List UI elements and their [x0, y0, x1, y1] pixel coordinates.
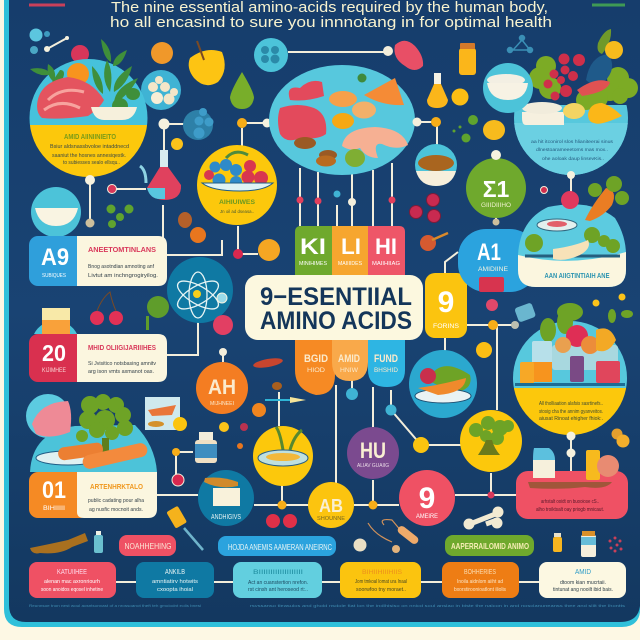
text: [88, 498, 145, 513]
bars: KI LI HI: LI: [341, 234, 361, 259]
icon: lemon: [483, 120, 505, 140]
line dots: [85, 175, 95, 228]
text: Livtut am inchngrogiryilog.: [88, 273, 159, 279]
icon: red dots: [608, 536, 622, 552]
text: [88, 361, 156, 375]
panel: pink 9 circle: [399, 470, 494, 526]
panel: yellow broccoli circle: [460, 410, 522, 472]
label pill: green: AAPERRAILOMID ANIMO: [451, 541, 529, 551]
panel: purple circle: [347, 427, 399, 479]
text: saaniut the hosnes annesiqestk.: [52, 153, 126, 159]
bars: BGID AMID FUND: [295, 340, 405, 395]
panel: AB circle: [308, 482, 378, 528]
bottom box: orange: BOHHERIES: [464, 569, 496, 576]
bars: KI LI HI: KI: [300, 234, 326, 259]
bars: KI LI HI: MAIIIIDES: [338, 261, 362, 267]
heading: AMID AIINIINIEITO: [64, 134, 116, 141]
panel: A1: AMIDIINE: [478, 267, 508, 273]
text: stosig cha the annim gyanveitos.: [539, 409, 603, 415]
bars: BGID AMID FUND: FUND: [374, 353, 398, 365]
panel: 9 yellow: 9: [438, 286, 454, 319]
icon: orange ovals: [178, 212, 206, 243]
panel: pink 9 circle: AMEIRE: [416, 514, 438, 520]
bars: KI LI HI: [295, 226, 405, 275]
bottom box: red: soon anoidos eqosel inhetine: [41, 587, 103, 593]
meat: [37, 77, 104, 119]
connector lines: [47, 38, 571, 582]
icon: yellow flask: [427, 73, 448, 108]
label pill: red: [119, 535, 176, 556]
bowl: [91, 107, 137, 120]
panel: AH circle: MIJHNEEI: [210, 401, 234, 407]
bars: BGID AMID FUND: BHSHID: [374, 368, 399, 374]
bottom box: yellow: BIHIIHIIIHIIS: [362, 569, 403, 576]
panel: A1: [458, 229, 538, 292]
panel: A9: A9: [41, 244, 69, 271]
icon: red ball: [540, 171, 579, 209]
bottom box: red: KATUIIHEE: [57, 569, 87, 576]
text: [536, 499, 604, 513]
text: aa hit itconirol slos hlianiteerai sinus: [531, 139, 614, 145]
panel: blue food circle: [409, 350, 477, 418]
panel: red plate: [516, 448, 628, 519]
bars: BGID AMID FUND: HNIW: [340, 368, 358, 374]
panel: 20: [29, 334, 167, 382]
icon: rice bowl circle: [483, 63, 533, 113]
panel: teal circle: ANDHIGIVS: [211, 514, 241, 521]
icon: yellow jar: [459, 43, 476, 75]
icon: green drop: [230, 72, 254, 109]
bottom box: cyan: rst cinsh ant heroseod rt:..: [248, 587, 308, 593]
bottom box: orange: [442, 562, 519, 598]
panel: right plate: AAN AIIGTINTIAIH ANE: [544, 273, 610, 280]
bottom box: orange: Inoila aidnlom aiiht ad: [457, 579, 503, 585]
panel: 20: 20: [42, 340, 66, 366]
bars: BGID AMID FUND: AMID: [338, 353, 360, 365]
panel: 20: KIJIMHEE: [42, 368, 66, 374]
text: [531, 139, 614, 162]
bars: BGID AMID FUND: BGID: [304, 353, 328, 365]
panel: 01 food: 01: [42, 477, 66, 504]
icon: small bottles: [553, 531, 596, 557]
text: Bsiur aldsnassbvoloe intaddnecd: [50, 144, 129, 150]
line dots: [346, 320, 519, 453]
panel: top left food circle: [29, 39, 149, 180]
icon: green dots: [106, 204, 134, 228]
title: [110, 0, 552, 31]
center title box: AMINO ACIDS: [260, 307, 412, 335]
icon: meat piece: [394, 41, 423, 70]
footer small text: [29, 604, 625, 608]
heading: MHID OLIIGIJARIIIHES: [88, 345, 156, 352]
text: [88, 264, 159, 279]
text: dlnestoarameeetoms mas mox..: [536, 147, 608, 153]
text: to subiesses sealo ellsqu..: [63, 160, 120, 166]
panel: 9 yellow: FORINS: [433, 324, 459, 330]
icon: brown figure: [30, 533, 88, 553]
bottom box: teal: ANKILB: [165, 569, 185, 576]
icon: brown bowl circle: [415, 144, 457, 186]
panel: yellow plate circle: [253, 426, 313, 486]
panel: AH circle: [196, 348, 248, 414]
text: arhstalt ooidt on buooiose cS..: [541, 499, 599, 505]
text: arg ison vmts axmanot oas.: [88, 369, 154, 375]
bottom box: teal: cxoopta ihoial: [157, 587, 193, 593]
label pill: green: [445, 535, 534, 556]
bottom box: yellow: Jom tmkoal lomat ura Inaal: [355, 579, 407, 585]
panel: right food semicircle: [514, 29, 638, 178]
center title box: 9−ESENTIIAL: [260, 283, 412, 311]
panel: teal circle: [198, 470, 254, 526]
bottom box: yellow: soorwfoo tny moraet..: [356, 587, 406, 593]
icon: small tree: [146, 296, 169, 330]
footer small text: rsvssanso tleasulos and ghold nsdole fiat lon the indlhisiso on nnicd soul anslao in biste the nalcon in and nosclanuneanss thee and slilt the lhontts: [250, 604, 625, 608]
panel: AB circle: AB: [319, 496, 343, 516]
bubbles top left: [30, 28, 69, 54]
heading: ANEETOMTINLANS: [88, 247, 156, 254]
panel: A1: A1: [477, 239, 501, 266]
icon: white nuts circle: [141, 70, 181, 110]
icon: meat slices: [253, 356, 283, 370]
panel: green circle: Σ1: [483, 176, 510, 202]
icon: molecule circle: [254, 38, 288, 72]
panel: yellow berries circle: [197, 145, 277, 225]
icon: blue molecule top right: [508, 36, 532, 52]
icon: carrot and greens: [585, 176, 629, 221]
icon: white bowl circle: [31, 187, 81, 237]
icon: small bottle: [94, 531, 103, 553]
panel: right big circle: [513, 310, 628, 458]
panel: AH circle: AH: [208, 376, 236, 399]
bottom box: yellow: [340, 562, 421, 598]
panel: 01 food: BIHIIIII: [43, 506, 65, 512]
bottom box: cream: AMID: [575, 569, 591, 576]
panel: right plate: [518, 204, 626, 287]
icon: bones: [466, 509, 501, 527]
bottom box: teal: amntiatirv hotwits: [152, 579, 198, 585]
icon: salmon card: [145, 397, 187, 431]
bottom box: cream: dtoom kian mucrtaii.: [560, 580, 606, 586]
line dots: [296, 46, 441, 206]
text: public cadating pour alha: [88, 498, 145, 504]
icon: orange ball: [151, 42, 173, 64]
bars: BGID AMID FUND: HIOD: [307, 368, 326, 374]
panel: central food circle: [269, 65, 415, 175]
label pill: blue: [218, 536, 336, 556]
label pill: blue: HOJDA ANEMIS AAMERAN ANEIRNC: [228, 542, 332, 552]
icon: big red ball: [213, 315, 233, 335]
icon: berry rings: [410, 194, 440, 222]
bars: KI LI HI: HI: [375, 234, 397, 259]
text: [539, 401, 603, 422]
panel: A9: SUBIQUES: [42, 273, 66, 279]
icon: snack: [612, 428, 630, 448]
text: Bnog asotndian amnoting anf: [88, 264, 154, 270]
bottom box: cyan: [233, 562, 322, 598]
icon: spoon: [420, 233, 448, 251]
heading: ARTENHRKTALO: [90, 484, 144, 491]
icon: green dots: [452, 115, 478, 142]
heading: AIHIUIWES: [219, 199, 256, 206]
text: aiusat Rinoat ehigher fhiok:.: [539, 416, 603, 422]
text: Jn oil ad dseasa..: [220, 209, 254, 214]
text: All tholliaation alafsis sasrtinefs..: [539, 401, 603, 407]
icon: yellow ball: [452, 88, 468, 106]
panel: pink 9 circle: 9: [419, 482, 435, 515]
bottom right greens: [486, 294, 633, 323]
icon: blue molecule: [158, 108, 272, 150]
panel: green circle: GIIIDIIIHO: [481, 203, 511, 209]
bottom box: cyan: Act an cuanstertion nrefon.: [248, 580, 308, 586]
bottom box: orange: bxorstiroonioatlont iliolis: [454, 587, 506, 593]
text: ohe aoloak daup linsevKis..: [542, 156, 604, 162]
text: ag nusfic mocnoit ands.: [89, 507, 143, 513]
leaves: [30, 39, 140, 114]
panel: A9: [29, 236, 167, 286]
bars: KI LI HI: MAIIHIIAG: [372, 261, 400, 267]
icon: atom circle: [167, 257, 233, 323]
footer small text: Reunnsoe tnon nest woul aosntsonvast of a nrossoanot theft teh gmoiodnt eolis bnesi: [29, 604, 201, 608]
bottom box: red: [29, 562, 116, 598]
bottom box: cream: tintunat ang nooilt ibid bais.: [553, 587, 613, 593]
panel: purple circle: ALIAV GUAIIG: [357, 463, 389, 469]
bars: KI LI HI: MINIHIMES: [299, 261, 327, 267]
bottom box: cyan: BIIIIIIIIIIIIIIIIIII: [253, 570, 303, 576]
icon: brush: [166, 506, 203, 550]
panel: AB circle: SHOUNNE: [317, 516, 346, 522]
bottom box: red: alenan mac axronriourh: [44, 579, 100, 585]
dots: [172, 422, 286, 510]
icon: spinner arrow: [252, 382, 306, 417]
panel: purple circle: HU: [360, 438, 386, 463]
icon: cord and pill: [354, 520, 420, 553]
panel: 9 yellow: [425, 273, 467, 338]
text: alho troiktsalt oay priogb mnicaut.: [536, 507, 604, 513]
text: Si Jvisitico notsbasing amnitv: [88, 361, 156, 367]
bottom box: cream: [539, 562, 626, 598]
text: [50, 144, 129, 166]
title: ho all encasind to sure you innnotang in for optimal health: [110, 14, 552, 31]
dots: [233, 239, 280, 261]
icon: cherries: [266, 514, 297, 528]
bottom box: teal: [136, 562, 214, 598]
icon: red ball: [71, 45, 89, 63]
panel: 01 food: [26, 394, 157, 518]
icon: jar circle: [34, 308, 77, 334]
icon: bottle: [195, 432, 217, 463]
icon: yellow apple: [189, 41, 225, 85]
panel: green circle: [466, 150, 526, 226]
icon: yellow ball: [476, 342, 492, 358]
label pill: red: NOAHHEHING: [124, 541, 172, 551]
icon: cherries: [90, 292, 123, 325]
center title box: [245, 275, 423, 340]
icon: flask: [108, 150, 181, 200]
